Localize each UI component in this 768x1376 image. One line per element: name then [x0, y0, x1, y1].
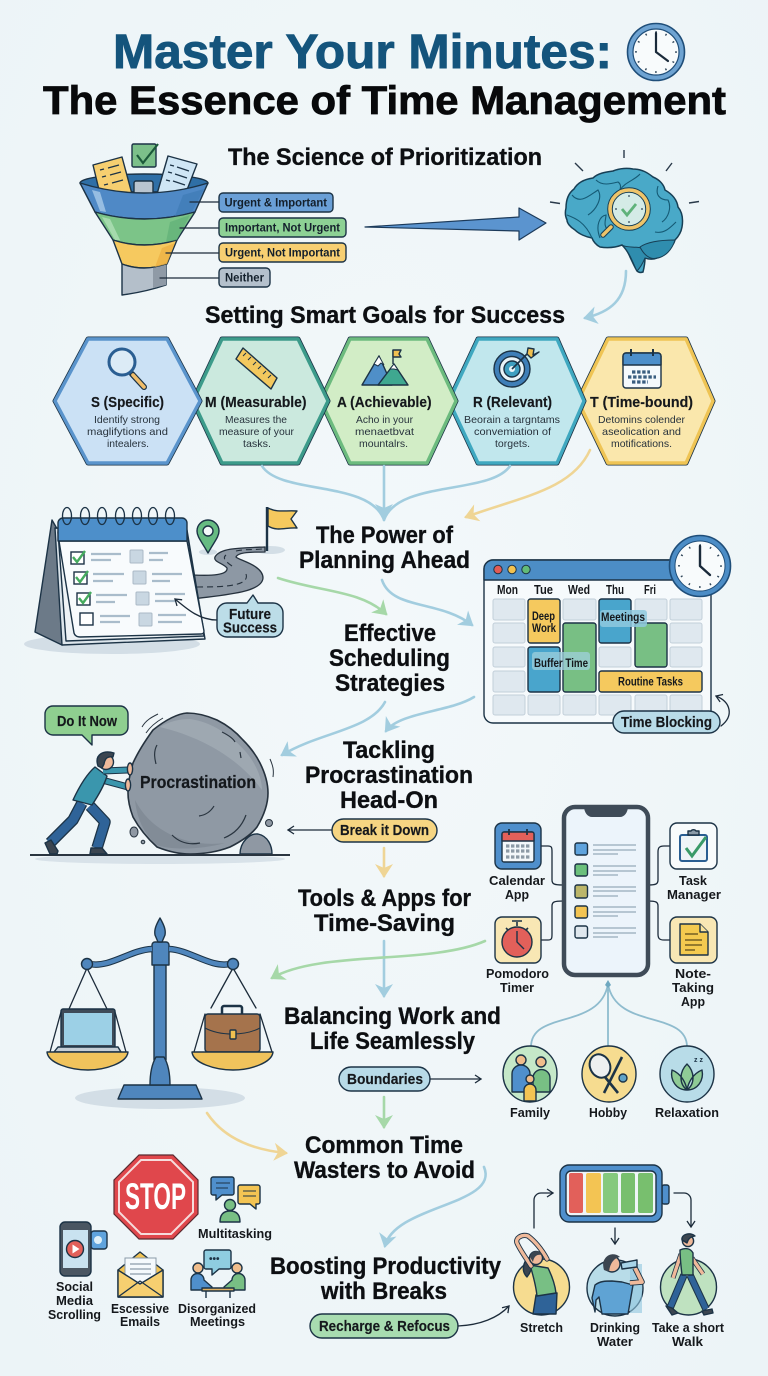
callout: future success	[217, 595, 283, 637]
arrows: planning to scheduling	[278, 578, 472, 625]
icon: target	[494, 348, 539, 387]
icon: funnel papers	[93, 144, 197, 195]
hexagon: R: torgets.	[495, 438, 530, 450]
label: hobby: Hobby	[589, 1105, 628, 1120]
label: calendar app: App	[505, 887, 529, 902]
label: task manager: Manager	[667, 887, 721, 902]
hexagon: M: M (Measurable)	[205, 395, 307, 411]
arrow: brain to goals	[585, 271, 626, 318]
day labels: Mon	[497, 583, 518, 597]
heading: effective scheduling strategies: Strategies	[335, 670, 445, 697]
briefcase	[205, 1006, 260, 1052]
block: deep work	[528, 599, 560, 643]
icon: title clock	[628, 24, 684, 80]
heading: balancing work and life	[284, 1003, 501, 1055]
arrow: boundaries to time wasters	[383, 1097, 385, 1127]
boulder: Procrastination	[140, 772, 256, 792]
pans	[47, 1052, 128, 1070]
label: multitasking: Multitasking	[198, 1226, 272, 1241]
hexagon: M: Measures the	[225, 414, 287, 426]
icon: battery	[560, 1165, 669, 1222]
block: buffer time: Buffer Time	[534, 656, 588, 670]
block: routine tasks	[599, 671, 702, 692]
arrow: time wasters to breaks	[385, 1167, 486, 1246]
icon: multitasking	[211, 1177, 260, 1222]
heading: common time wasters: Wasters to Avoid	[294, 1157, 475, 1184]
arrows: goals to planning	[262, 450, 590, 520]
day labels: Thu	[606, 583, 624, 597]
label: disorganized meetings: Disorganized	[178, 1301, 256, 1316]
label: note-taking app: Taking	[672, 980, 714, 995]
person	[45, 752, 133, 854]
label: pomodoro timer: Pomodoro	[486, 966, 549, 981]
empty grid cells	[493, 599, 702, 715]
label: calendar app: Calendar	[489, 873, 545, 888]
hexagon: A	[321, 339, 456, 463]
heading: the power of planning ahead: Planning Ahead	[299, 547, 470, 574]
pill: boundaries: Boundaries	[347, 1072, 423, 1088]
label: relaxation: Relaxation	[655, 1105, 719, 1120]
beam	[90, 949, 230, 965]
label: task manager	[667, 873, 721, 902]
phone	[564, 806, 648, 975]
callout: future success: Success	[223, 620, 277, 636]
day labels: Wed	[568, 583, 590, 597]
heading: tools and apps: Time-Saving	[314, 910, 455, 937]
block: routine tasks: Routine Tasks	[618, 674, 683, 688]
heading: balancing work and life: Balancing Work and	[284, 1003, 501, 1030]
icon: hobby	[582, 1046, 636, 1102]
arrow: scale to time wasters	[207, 1113, 286, 1153]
block: deep work: Work	[532, 621, 556, 635]
callout: do it now	[45, 706, 128, 745]
label: drinking water	[590, 1320, 640, 1349]
pill: recharge and refocus	[310, 1306, 509, 1338]
label: pomodoro timer: Timer	[500, 980, 534, 995]
label: urgent not important: Urgent, Not Important	[225, 246, 340, 260]
location pin	[197, 520, 219, 553]
icon: relaxation	[660, 1046, 714, 1102]
day labels	[497, 583, 656, 597]
heading: boosting productivity	[270, 1253, 502, 1305]
label: urgent and important	[219, 193, 333, 212]
icon: stretch	[514, 1235, 570, 1315]
heading: boosting productivity: Boosting Productivity	[270, 1253, 502, 1280]
laptop	[54, 1009, 121, 1052]
label: drinking water: Drinking	[590, 1320, 640, 1335]
label: family: Family	[510, 1105, 551, 1120]
icon: relaxation: z z	[694, 1057, 703, 1064]
calendar back support	[35, 520, 75, 645]
strings	[50, 968, 272, 1052]
icon: stop sign: STOP	[125, 1176, 186, 1217]
illustration: person pushing boulder	[30, 713, 290, 864]
label: social media scrolling: Scrolling	[48, 1307, 101, 1322]
boulder	[128, 713, 273, 854]
pill: time blocking	[613, 696, 729, 733]
hexagon: A: menaetbvat	[355, 426, 414, 438]
hexagon: R: R (Relevant)	[473, 395, 552, 411]
road	[193, 547, 265, 599]
block: deep work: Deep	[532, 609, 555, 623]
hexagon: M: measure of your	[219, 426, 294, 438]
label: stretch: Stretch	[520, 1320, 563, 1335]
callout: do it now: Do It Now	[57, 714, 118, 730]
arrow: funnel to brain	[365, 208, 546, 240]
hexagon: A: A (Achievable)	[337, 395, 432, 411]
checklist rows	[71, 550, 186, 626]
title: The Essence of Time Management	[43, 79, 726, 123]
label: social media scrolling	[48, 1279, 101, 1322]
heading: setting smart goals: Setting Smart Goals for Success	[205, 302, 565, 329]
icon: walk	[660, 1234, 716, 1315]
label: pomodoro timer	[486, 966, 549, 995]
icon: stop sign	[114, 1155, 198, 1239]
day labels: Fri	[644, 583, 656, 597]
pebbles	[130, 820, 272, 844]
pill: boundaries	[339, 1067, 481, 1091]
heading: effective scheduling strategies: Effective	[344, 620, 436, 647]
flag	[267, 507, 297, 551]
connector tree: life circles to phone	[531, 980, 687, 1047]
label: excessive emails: Escessive	[111, 1301, 169, 1316]
hexagon: R: Beorain a targntams	[464, 414, 560, 426]
hexagon: A: mountalrs.	[359, 438, 408, 450]
heading: tools and apps	[298, 885, 471, 937]
title	[43, 26, 726, 123]
heading: effective scheduling strategies	[329, 620, 450, 697]
illustration: balance scale	[47, 918, 273, 1109]
arrows: tools to balance	[272, 941, 485, 996]
icon: calendar app	[495, 823, 541, 869]
icon: excessive emails	[118, 1252, 163, 1297]
icon: mountains and flag	[362, 350, 408, 385]
icon: family	[503, 1046, 557, 1102]
hexagon: T: Detomins colender	[598, 414, 685, 426]
icon: task manager	[670, 823, 717, 869]
icon: drinking water	[587, 1254, 643, 1316]
hexagon: A: Acho in your	[356, 414, 413, 426]
pole and base	[118, 918, 202, 1099]
label: social media scrolling: Social	[56, 1279, 93, 1294]
hexagon: S: intealers.	[107, 438, 149, 450]
heading: tools and apps: Tools & Apps for	[298, 885, 471, 912]
heading: effective scheduling strategies: Scheduling	[329, 645, 450, 672]
label: important not urgent	[219, 218, 346, 237]
icon: brain with magnifier	[550, 150, 699, 272]
heading: tackling procrastination head-on: Tackling	[343, 737, 435, 764]
hexagon: T: aseolication and	[602, 426, 681, 438]
hexagon: T	[578, 339, 713, 463]
funnel diagram	[80, 144, 219, 295]
arrows: scheduling to procrastination	[282, 697, 474, 755]
block: meetings label: Meetings	[601, 610, 645, 624]
pill: time blocking: Time Blocking	[621, 715, 712, 731]
label: excessive emails: Emails	[120, 1314, 160, 1329]
hexagon: R: convemiation of	[474, 426, 551, 438]
heading: common time wasters: Common Time	[305, 1132, 463, 1159]
icon: disorganized meetings	[191, 1250, 245, 1298]
hexagon: T: motifications.	[611, 438, 672, 450]
heading: common time wasters	[294, 1132, 475, 1184]
hexagon: M: tasks.	[243, 438, 271, 450]
hexagon: T: T (Time-bound)	[590, 395, 693, 411]
pill: recharge and refocus: Recharge & Refocus	[319, 1319, 450, 1335]
arrows: battery and breaks	[534, 1193, 691, 1244]
icon: ruler	[236, 348, 277, 389]
label: neither	[219, 268, 270, 287]
calendar front page	[59, 541, 204, 637]
block: buffer time	[528, 647, 590, 692]
callout: future success: Future	[229, 607, 271, 623]
small rock	[240, 834, 272, 854]
icon: magnifier	[109, 349, 144, 387]
icon: pomodoro timer	[495, 917, 541, 963]
connectors	[541, 846, 670, 940]
heading: the power of planning ahead: The Power of	[316, 522, 454, 549]
hexagon: S: S (Specific)	[91, 395, 164, 411]
label: drinking water: Water	[597, 1334, 633, 1349]
icon: schedule clock	[670, 536, 730, 596]
label: take a short walk: Take a short	[652, 1320, 725, 1335]
label: social media scrolling: Media	[56, 1293, 94, 1308]
hexagon: S	[55, 339, 200, 463]
label: note-taking app: App	[681, 994, 705, 1009]
label: take a short walk	[652, 1320, 725, 1349]
icon: calendar	[623, 349, 661, 388]
illustration: wall calendar with road to flag	[24, 507, 297, 654]
icon: note-taking app	[670, 917, 717, 963]
icon: disorganized meetings: •••	[209, 1254, 220, 1265]
hexagon: R	[449, 339, 584, 463]
label: note-taking app	[672, 966, 714, 1009]
pill: break it down: Break it Down	[340, 823, 429, 839]
label: disorganized meetings	[178, 1301, 256, 1329]
label: task manager: Task	[679, 873, 708, 888]
label: note-taking app: Note-	[675, 966, 711, 981]
calendar rings	[62, 508, 174, 524]
ground line	[30, 854, 290, 856]
heading: tackling procrastination head-on: Head-On	[340, 787, 438, 814]
heading: tackling procrastination head-on: Procrastination	[305, 762, 473, 789]
calendar page stack	[55, 528, 205, 645]
panel: weekly time-blocking calendar	[484, 560, 711, 723]
arrow: break it down to tools	[383, 848, 385, 876]
heading: balancing work and life: Life Seamlessly	[310, 1028, 476, 1055]
label: disorganized meetings: Meetings	[190, 1314, 245, 1329]
heading: the science of prioritization: The Science of Prioritization	[228, 144, 542, 171]
label: urgent not important	[219, 243, 346, 262]
label: urgent and important: Urgent & Important	[224, 196, 327, 210]
block: thursday blue	[599, 599, 631, 643]
day labels: Tue	[534, 583, 553, 597]
title: Master Your Minutes:	[113, 26, 612, 79]
phone and app icons	[486, 806, 721, 1009]
label: neither: Neither	[225, 270, 264, 284]
hexagon: M	[193, 339, 328, 463]
block: friday green	[635, 623, 667, 667]
label: take a short walk: Walk	[672, 1334, 704, 1349]
heading: boosting productivity: with Breaks	[320, 1278, 447, 1305]
label: excessive emails	[111, 1301, 169, 1329]
block: wednesday green	[563, 623, 596, 692]
label: calendar app	[489, 873, 545, 902]
heading: tackling procrastination head-on	[305, 737, 473, 814]
hexagon: S: maglifytions and	[87, 426, 168, 438]
icon: social media phone	[60, 1222, 107, 1276]
pill: break it down	[288, 819, 437, 842]
heading: the power of planning ahead	[299, 522, 470, 574]
hexagon: S: Identify strong	[94, 414, 160, 426]
label: important not urgent: Important, Not Urgent	[225, 220, 340, 234]
